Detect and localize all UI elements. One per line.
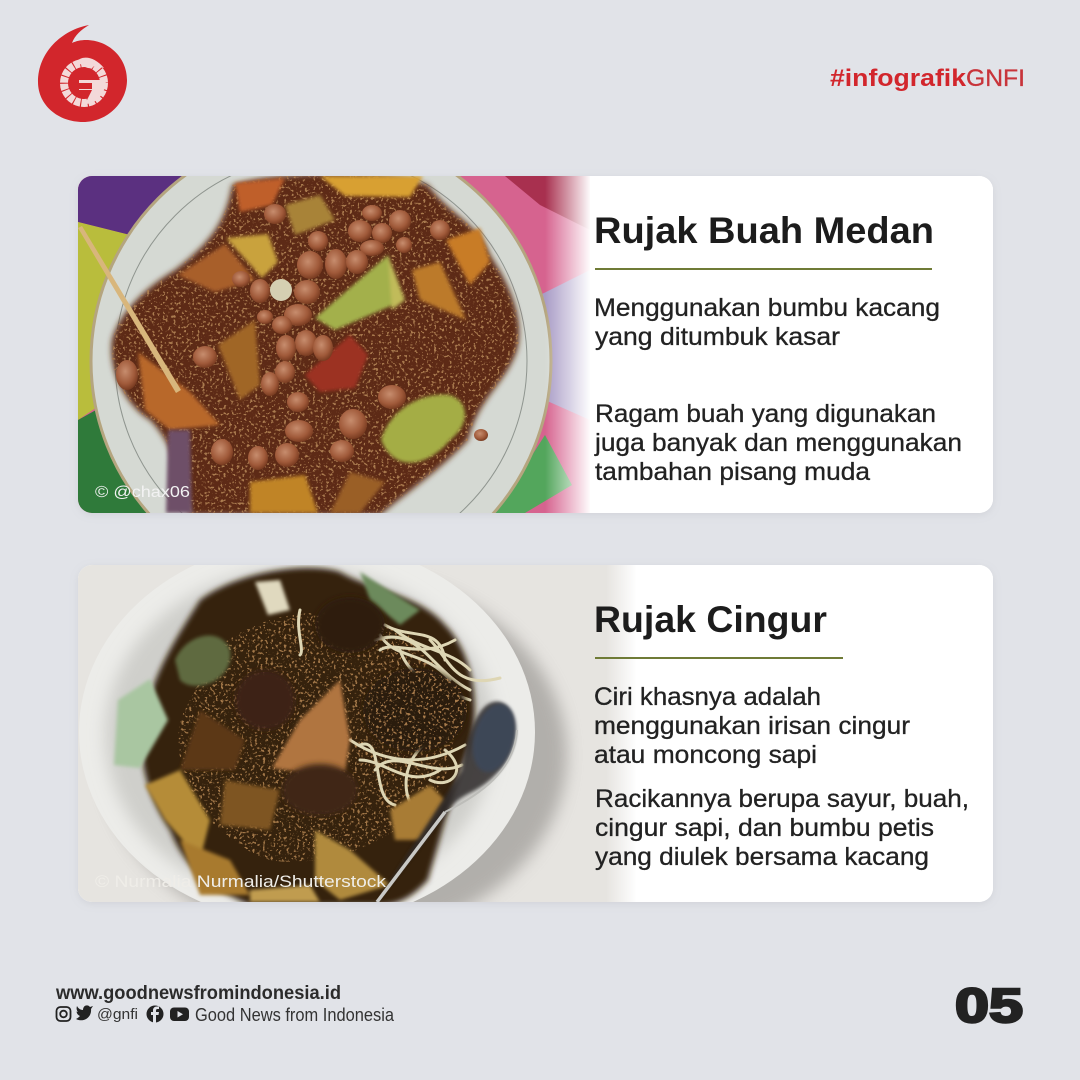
text: racikan — [595, 785, 969, 871]
card background — [78, 565, 993, 902]
fade — [545, 176, 591, 513]
heading: Rujak Buah Medan — [594, 210, 934, 251]
text: racikan: cingur sapi, dan bumbu petis — [595, 814, 934, 842]
handle: @gnfi — [97, 1006, 138, 1023]
food pieces — [114, 580, 445, 902]
footer: website and social — [55, 983, 395, 1025]
hashtag: GNFI — [966, 65, 1025, 92]
icon: youtube — [170, 1008, 189, 1021]
sauce — [111, 174, 519, 515]
text: ragam buah: tambahan pisang muda — [595, 458, 870, 486]
fade — [614, 565, 636, 902]
divider — [595, 268, 932, 270]
text: ragam buah: Ragam buah yang digunakan — [595, 400, 936, 428]
text: ciri khas: Ciri khasnya adalah — [594, 683, 821, 711]
sprouts — [299, 610, 500, 815]
credit: © Nurmalia Nurmalia/Shutterstock — [95, 872, 387, 891]
hashtag — [830, 65, 1025, 92]
text: bumbu: yang ditumbuk kasar — [595, 323, 840, 351]
text: ciri khas — [594, 683, 910, 769]
page number: 05 — [955, 980, 1023, 1033]
divider — [595, 657, 843, 659]
text: racikan: yang diulek bersama kacang — [595, 843, 929, 871]
text: bumbu: Menggunakan bumbu kacang — [594, 294, 940, 322]
sauce and food — [142, 568, 475, 905]
card background — [78, 176, 993, 513]
logo — [38, 25, 127, 122]
text: ciri khas: atau moncong sapi — [594, 741, 817, 769]
panel: Rujak Buah Medan — [78, 176, 993, 514]
photo: rujak cingur — [78, 565, 992, 902]
text: ciri khas: menggunakan irisan cingur — [594, 712, 910, 740]
brand name: Good News from Indonesia — [195, 1005, 395, 1025]
spoon — [377, 702, 515, 902]
fruit pieces — [138, 176, 490, 513]
text: ragam buah — [594, 400, 962, 486]
text: racikan: Racikannya berupa sayur, buah, — [595, 785, 969, 813]
skewer — [78, 226, 181, 393]
credit: © @chax06 — [95, 484, 190, 501]
photo: rujak buah — [78, 176, 993, 513]
icon: facebook — [146, 1006, 164, 1023]
website: www.goodnewsfromindonesia.id — [55, 983, 341, 1004]
peanuts — [116, 204, 488, 470]
icon: instagram — [56, 1007, 70, 1021]
text: bumbu — [594, 294, 940, 351]
panel: Rujak Cingur — [78, 565, 993, 904]
icon: twitter — [76, 1005, 93, 1020]
hashtag: #infografik — [830, 65, 967, 92]
heading: Rujak Cingur — [594, 599, 827, 640]
text: ragam buah: juga banyak dan menggunakan — [594, 429, 962, 457]
